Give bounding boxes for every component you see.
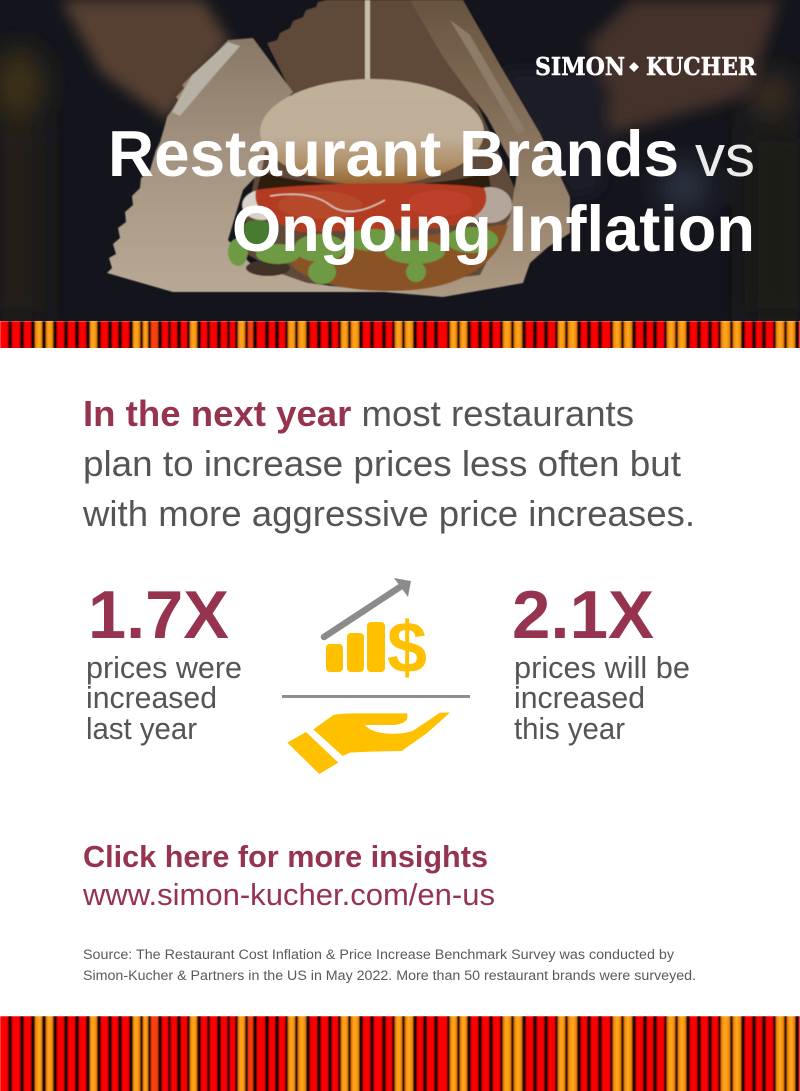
lead statement bbox=[82, 393, 695, 534]
lead statement: plan to increase prices less often but bbox=[83, 443, 681, 484]
source note: Simon-Kucher & Partners in the US in May 2022. More than 50 restaurant brands were surveyed. bbox=[83, 968, 696, 983]
top stripe band bbox=[0, 321, 800, 348]
skewer bbox=[365, 0, 370, 80]
stat: last year: 1.7X bbox=[88, 577, 229, 653]
lead statement: In the next year most restaurants bbox=[83, 393, 634, 434]
source note bbox=[83, 947, 696, 983]
logo bbox=[535, 52, 757, 81]
icon: dollar sign: $ bbox=[387, 608, 427, 688]
stat: this year: this year bbox=[514, 711, 625, 746]
dark gap bbox=[257, 172, 491, 190]
logo: SIMON bbox=[535, 52, 625, 81]
stat: last year bbox=[86, 577, 242, 746]
stat: this year: increased bbox=[514, 680, 645, 715]
call to action bbox=[82, 839, 495, 912]
icon: open hand bbox=[287, 713, 450, 774]
icon: bars bbox=[326, 622, 385, 672]
back paper bbox=[240, 0, 520, 285]
lettuce bbox=[228, 220, 498, 284]
source note: Source: The Restaurant Cost Inflation & Price Increase Benchmark Survey was conducted by bbox=[83, 947, 674, 962]
stat: this year: 2.1X bbox=[512, 577, 654, 653]
icon: rising price chart over open hand bbox=[282, 578, 470, 774]
title bbox=[108, 117, 755, 265]
white cheese edge bbox=[241, 190, 268, 221]
divider line bbox=[282, 695, 470, 698]
stat: last year: increased bbox=[86, 680, 217, 715]
stat: last year: last year bbox=[86, 711, 197, 746]
call to action: www.simon-kucher.com/en-us bbox=[82, 877, 495, 912]
lower bun bbox=[285, 225, 508, 291]
header photo: burger held in paper bbox=[0, 0, 800, 321]
stat: this year bbox=[512, 577, 690, 746]
icon: rising arrow bbox=[324, 578, 411, 637]
title: vs bbox=[695, 124, 755, 189]
logo: KUCHER bbox=[646, 52, 757, 81]
bottom stripe band bbox=[0, 1016, 800, 1091]
front left paper bbox=[107, 38, 420, 292]
title: Restaurant Brands bbox=[108, 117, 679, 190]
right fold of paper bbox=[385, 0, 571, 298]
stat: this year: prices will be bbox=[514, 650, 690, 685]
lead statement: with more aggressive price increases. bbox=[82, 493, 695, 534]
call to action: Click here for more insights bbox=[83, 839, 488, 874]
top bun bbox=[260, 79, 484, 185]
tomato bbox=[255, 183, 486, 232]
stat: last year: prices were bbox=[86, 650, 242, 685]
title: Ongoing Inflation bbox=[232, 192, 755, 265]
shadow under lettuce bbox=[246, 260, 290, 276]
